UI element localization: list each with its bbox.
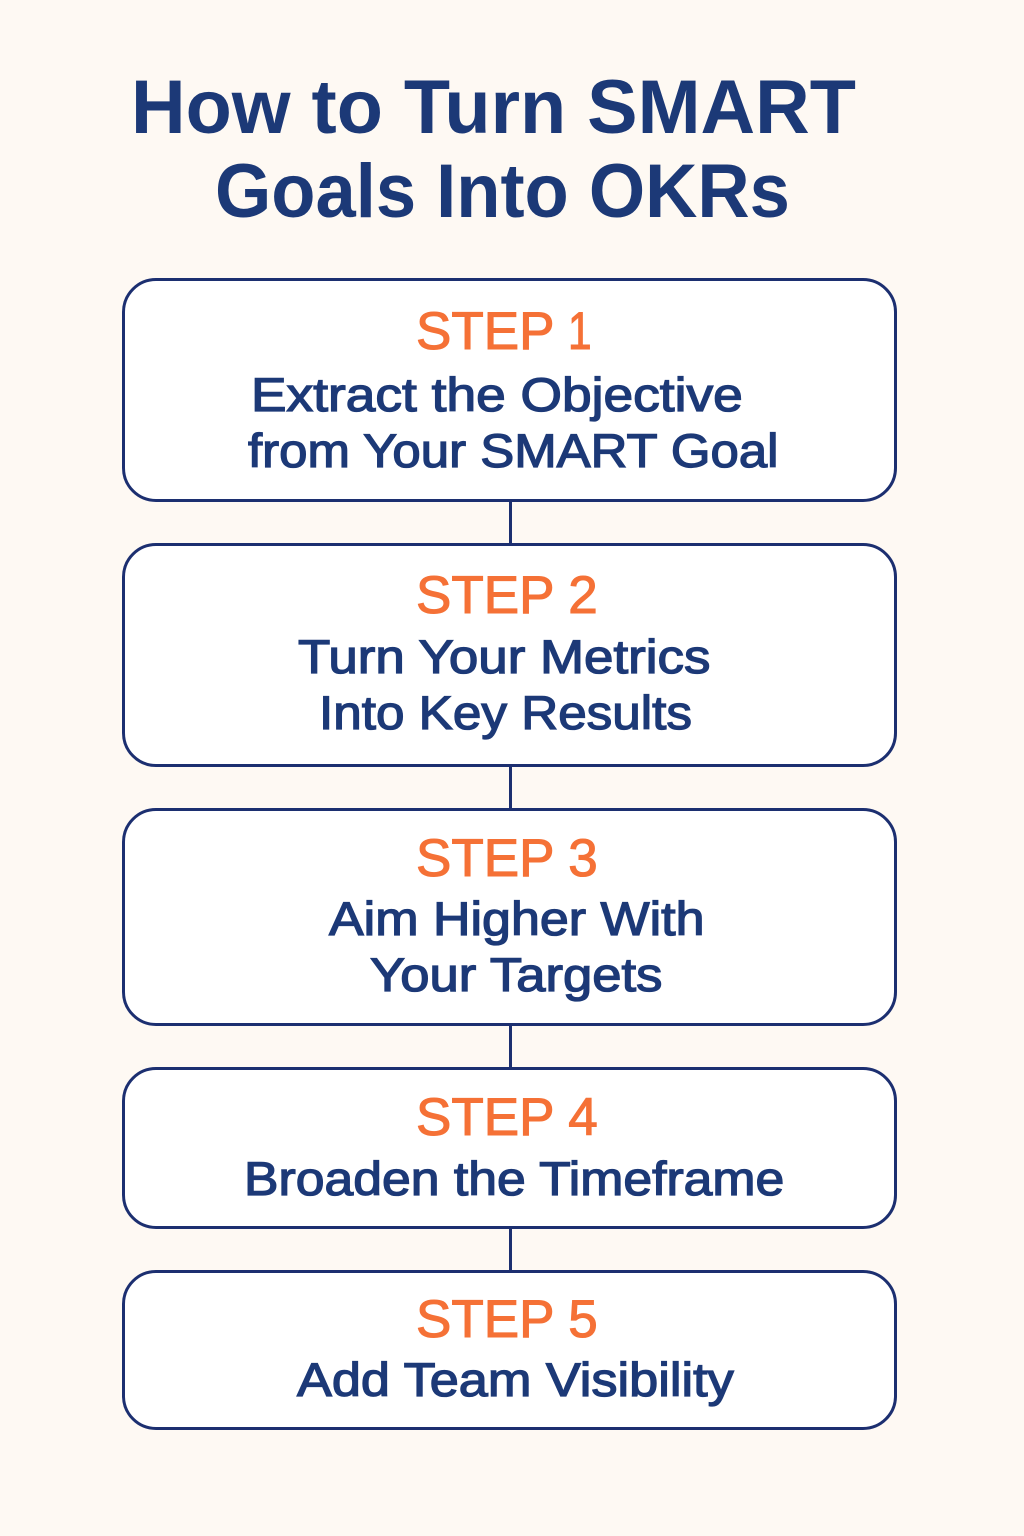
connector: step 4 to 5 — [509, 1227, 512, 1273]
step 1 text — [248, 368, 778, 477]
panel: step 5 — [122, 1270, 897, 1430]
step 1 text: Extract the Objective — [251, 368, 743, 421]
step 3 text: Aim Higher With — [329, 892, 705, 945]
step 1 text: from Your SMART Goal — [248, 424, 778, 477]
connector: step 2 to 3 — [509, 765, 512, 811]
step 1 label: STEP — [416, 302, 553, 361]
panel: step 2 — [122, 543, 897, 767]
step 3 text: Your Targets — [370, 948, 662, 1001]
panel: step 3 — [122, 808, 897, 1026]
step 3 text — [328, 892, 705, 1002]
connector: step 1 to 2 — [509, 500, 512, 546]
step 2 label: STEP 2 — [416, 566, 598, 625]
step 3 label: STEP 3 — [416, 829, 598, 888]
step 1 label: 1 — [568, 302, 592, 361]
step 4 text: Broaden the Timeframe — [244, 1152, 784, 1205]
step 5 label: STEP 5 — [416, 1290, 598, 1349]
step 4 label: STEP 4 — [416, 1088, 598, 1147]
connector: step 3 to 4 — [509, 1024, 512, 1070]
step 2 text — [298, 630, 710, 740]
step 2 text: Into Key Results — [319, 686, 692, 739]
title — [131, 65, 856, 234]
panel: step 4 — [122, 1067, 897, 1229]
step 5 text: Add Team Visibility — [297, 1353, 734, 1406]
panel: step 1 — [122, 278, 897, 502]
title: How to Turn SMART — [131, 65, 856, 150]
step 2 text: Turn Your Metrics — [298, 630, 710, 683]
title: Goals Into OKRs — [215, 149, 790, 234]
